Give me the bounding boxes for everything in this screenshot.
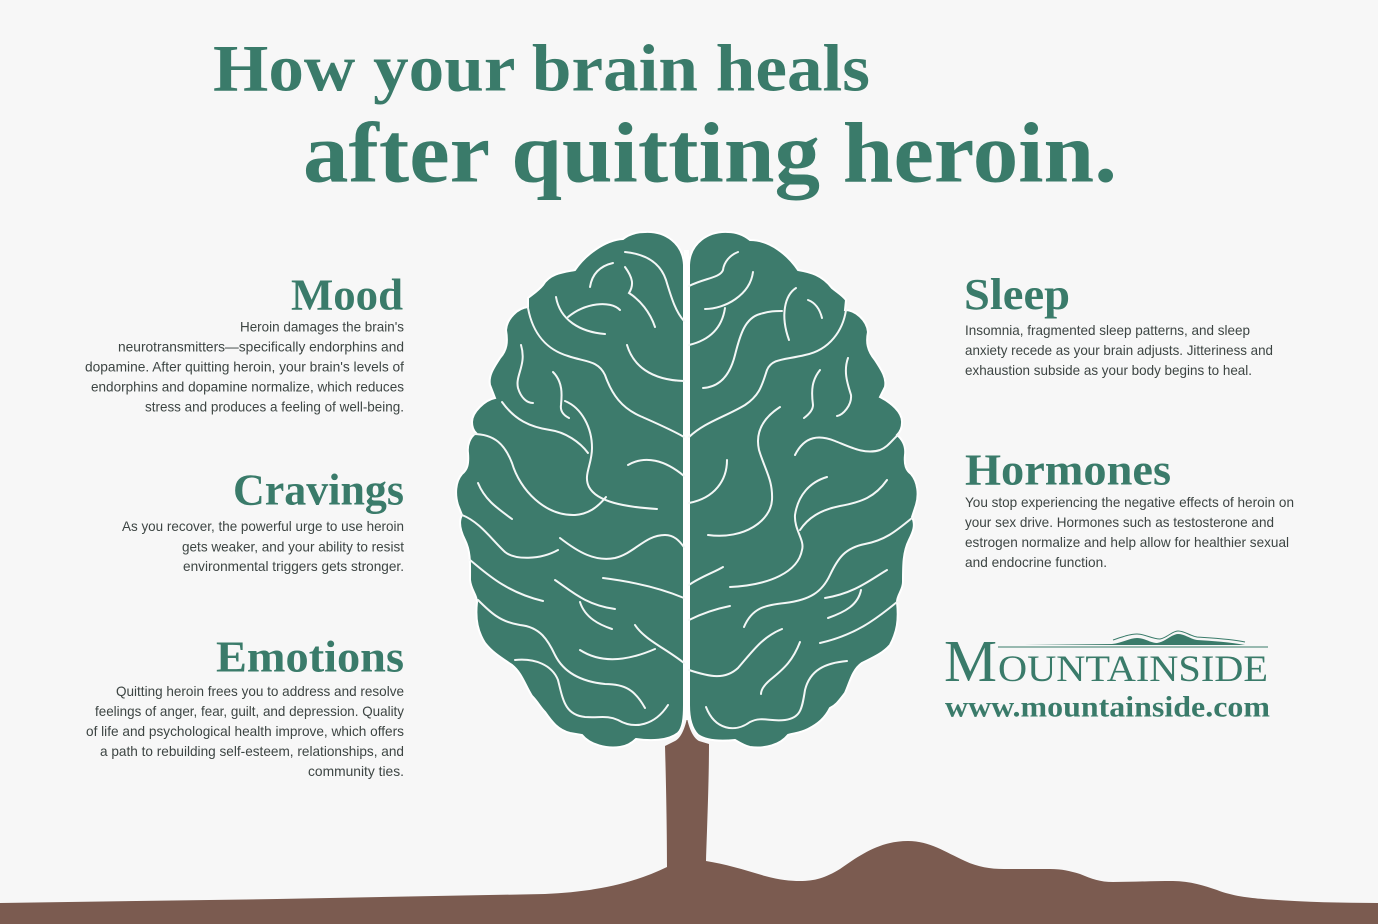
text block: mood: dopamine. After quitting heroin, your brain's levels of (85, 360, 404, 374)
brain (456, 232, 918, 748)
text block: hormones (965, 495, 1294, 570)
panel: cravings (122, 466, 404, 574)
heading: cravings: Cravings (233, 466, 404, 514)
panel: sleep (964, 270, 1273, 378)
text block: emotions (86, 684, 404, 779)
text block: mood (85, 320, 404, 414)
text block: sleep: anxiety recede as your brain adjusts. Jitteriness and (965, 343, 1273, 358)
brain midline (684, 250, 689, 720)
logo: mountainside (944, 628, 1270, 724)
text block: emotions: Quitting heroin frees you to address and resolve (116, 684, 404, 699)
text block: cravings: gets weaker, and your ability to resist (182, 540, 404, 554)
brain: right hemisphere (689, 232, 918, 748)
text block: hormones: and endocrine function. (965, 555, 1107, 570)
heading: emotions: Emotions (216, 632, 404, 682)
brain folds (462, 252, 912, 728)
panel: mood (85, 270, 404, 414)
text block: hormones: You stop experiencing the negative effects of heroin on (965, 495, 1294, 510)
text block: mood: stress and produces a feeling of well-being. (145, 400, 404, 414)
title (213, 32, 1117, 200)
text block: emotions: a path to rebuilding self-esteem, relationships, and (100, 744, 404, 759)
text block: mood: endorphins and dopamine normalize, which reduces (91, 380, 404, 394)
heading: mood: Mood (291, 270, 403, 320)
text block: emotions: of life and psychological health improve, which offers (86, 724, 404, 739)
title: after quitting heroin. (303, 104, 1117, 200)
text block: mood: Heroin damages the brain's (240, 320, 404, 334)
text block: sleep: Insomnia, fragmented sleep patterns, and sleep (965, 323, 1250, 338)
logo wordmark remainder: OUNTAINSIDE (998, 649, 1268, 690)
text block: mood: neurotransmitters—specifically endorphins and (118, 340, 404, 354)
ground and trunk (0, 718, 1378, 924)
text block: hormones: estrogen normalize and help allow for healthier sexual (965, 535, 1289, 550)
text block: cravings: As you recover, the powerful urge to use heroin (122, 519, 404, 534)
title: How your brain heals (213, 32, 870, 106)
logo wordmark: M (944, 628, 997, 694)
text block: cravings: environmental triggers gets stronger. (183, 559, 404, 574)
text block: emotions: community ties. (308, 764, 404, 779)
icon: mountain ridge (998, 631, 1268, 647)
text block: sleep (965, 323, 1273, 378)
panel: emotions (86, 632, 404, 779)
heading: hormones: Hormones (965, 446, 1171, 494)
text block: sleep: exhaustion subside as your body begins to heal. (965, 363, 1252, 378)
text block: cravings (122, 519, 404, 574)
brain: left hemisphere (456, 232, 684, 748)
heading: sleep: Sleep (964, 270, 1070, 319)
website url: www.mountainside.com (945, 690, 1270, 724)
text block: emotions: feelings of anger, fear, guilt, and depression. Quality (95, 704, 404, 719)
panel: hormones (965, 446, 1294, 570)
text block: hormones: your sex drive. Hormones such as testosterone and (965, 515, 1274, 530)
